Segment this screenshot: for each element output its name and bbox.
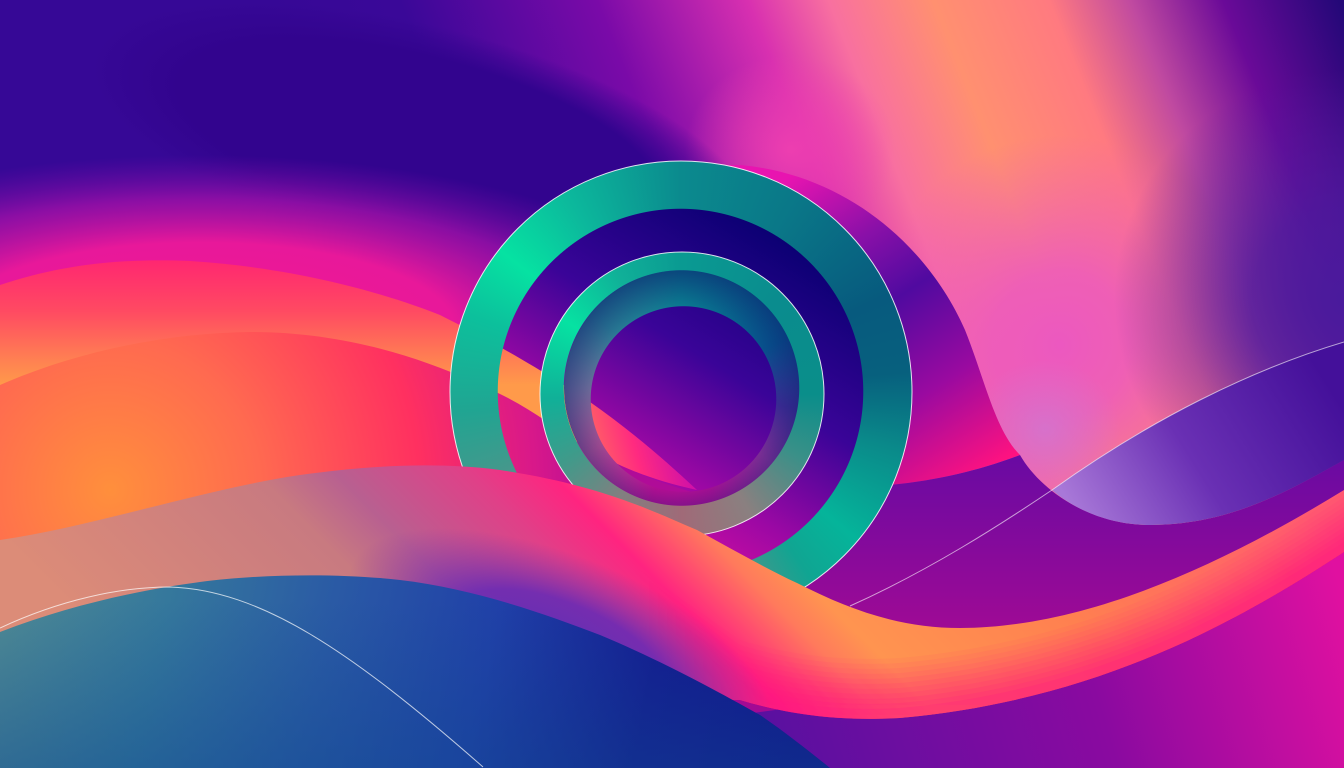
- main flowing wave: [0, 465, 1344, 719]
- middle shaded annulus: [564, 270, 800, 506]
- orange wave fading end: [582, 402, 697, 490]
- right violet haze: [1114, 70, 1344, 530]
- right hairline curve: [850, 342, 1344, 606]
- wave purple shadow: [363, 536, 762, 706]
- outer teal ring: [450, 161, 912, 623]
- coral wave: [0, 332, 692, 570]
- ring interior: [495, 206, 867, 578]
- blue hill: [0, 575, 830, 768]
- swell behind the rings: [700, 165, 1020, 500]
- pale lilac glow near the wave fold: [970, 360, 1120, 500]
- left hairline arc: [0, 587, 483, 767]
- lower right purple field: [700, 455, 1344, 768]
- pale violet blob: [1052, 342, 1344, 525]
- bottom right magenta field: [700, 530, 1344, 768]
- wave pink underside: [689, 498, 1344, 719]
- hot pink glow: [685, 55, 895, 245]
- magenta glow above left waves: [0, 155, 710, 505]
- dark indigo glow: [62, 0, 778, 334]
- inner teal ring: [540, 252, 824, 536]
- inner ring hairline: [540, 252, 824, 536]
- blue hill lower shade: [0, 575, 830, 768]
- foreground layers: hairlines and front waves: [0, 160, 1344, 768]
- orange wave band: [0, 260, 590, 520]
- outer ring hairline: [450, 161, 912, 623]
- pink glow on the right: [865, 135, 1255, 555]
